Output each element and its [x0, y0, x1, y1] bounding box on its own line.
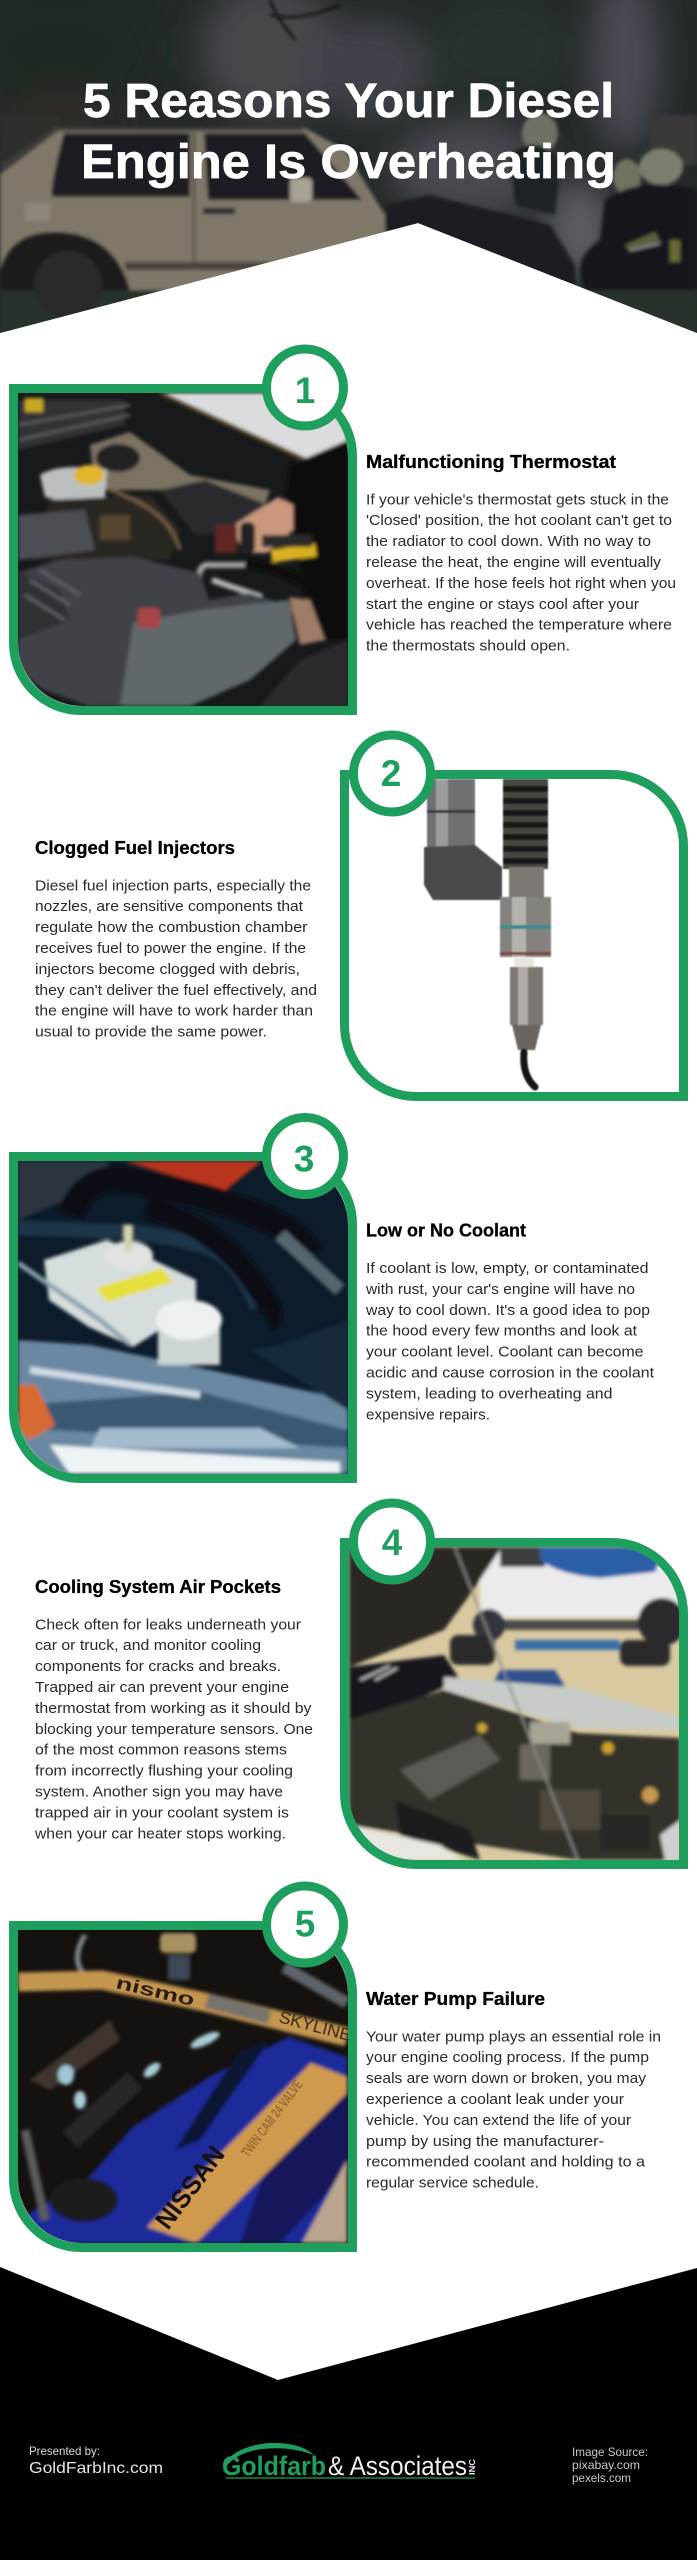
- number badge 3: [266, 1118, 344, 1194]
- photo lettering: SKYLINE: [277, 2008, 353, 2045]
- presented by: GoldFarbInc.com: [29, 2460, 163, 2477]
- text block 1: [366, 452, 676, 655]
- photo: Nissan Skyline engine: [18, 1930, 353, 2243]
- text block 5: regular service schedule.: [366, 2175, 539, 2192]
- text block 2: Clogged Fuel Injectors: [35, 838, 235, 858]
- number badge 4: 4: [382, 1522, 403, 1563]
- text block 2: nozzles, are sensitive components that: [35, 898, 304, 915]
- photo: mechanic working on engine: [18, 393, 348, 706]
- photo: coolant reservoir: [18, 1161, 348, 1474]
- panel 4: cooling system air pockets: [344, 1503, 686, 1864]
- text block 1: If your vehicle's thermostat gets stuck in the: [366, 491, 669, 508]
- text block 5: vehicle. You can extend the life of your: [366, 2112, 631, 2129]
- text block 5: recommended coolant and holding to a: [366, 2154, 646, 2171]
- text block 2: usual to provide the same power.: [35, 1024, 267, 1041]
- logo: Goldfarb &amp; Associates: Goldfarb: [222, 2451, 326, 2481]
- title: Engine Is Overheating: [81, 136, 616, 189]
- header photo: smoking car with firefighters: [0, 0, 697, 345]
- green frame: [14, 388, 352, 710]
- text block 3: your coolant level. Coolant can become: [366, 1344, 644, 1361]
- text block 5: seals are worn down or broken, you may: [366, 2070, 647, 2087]
- text block 5: your engine cooling process. If the pump: [366, 2049, 649, 2066]
- image source: Image Source:: [572, 2445, 648, 2459]
- green frame: [344, 1542, 684, 1864]
- text block 3: with rust, your car's engine will have no: [365, 1281, 635, 1298]
- text block 2: receives fuel to power the engine. If the: [35, 940, 306, 957]
- text block 5: Water Pump Failure: [366, 1989, 545, 2009]
- image source: [572, 2445, 648, 2485]
- text block 2: Diesel fuel injection parts, especially the: [35, 877, 311, 894]
- number badge 4: [354, 1503, 430, 1580]
- number badge 2: [354, 735, 430, 812]
- green frame: [14, 1926, 352, 2248]
- logo: Goldfarb &amp; Associates: [222, 2443, 477, 2481]
- photo: fuel injector: [424, 779, 551, 1087]
- presented by: Presented by:: [29, 2444, 100, 2458]
- photo lettering: TWIN CAM 24 VALVE: [238, 2077, 306, 2160]
- text block 3: way to cool down. It's a good idea to pop: [365, 1302, 650, 1319]
- text block 2: [35, 838, 317, 1041]
- panel 1: malfunctioning thermostat: [14, 349, 352, 710]
- logo: Goldfarb &amp; Associates: INC: [468, 2459, 477, 2475]
- text block 1: release the heat, the engine will eventually: [366, 554, 662, 571]
- photo: open engine bay in a garage: [349, 1547, 686, 1860]
- title: 5 Reasons Your Diesel: [83, 75, 614, 128]
- text block 2: regulate how the combustion chamber: [35, 919, 308, 936]
- text block 1: Malfunctioning Thermostat: [366, 452, 616, 472]
- footer band: [0, 2267, 697, 2560]
- text block 3: If coolant is low, empty, or contaminated: [366, 1260, 648, 1277]
- text block 4: Check often for leaks underneath your: [35, 1616, 301, 1633]
- text block 1: 'Closed' position, the hot coolant can't get to: [366, 512, 672, 529]
- text block 4: Cooling System Air Pockets: [35, 1577, 281, 1597]
- text block 5: experience a coolant leak under your: [366, 2091, 624, 2108]
- text block 2: injectors become clogged with debris,: [35, 961, 300, 978]
- panel 3: low or no coolant: [14, 1118, 352, 1478]
- text block 3: Low or No Coolant: [366, 1221, 526, 1241]
- text block 5: [366, 1989, 661, 2192]
- text block 3: system, leading to overheating and: [366, 1385, 612, 1402]
- number badge 2: 2: [381, 753, 401, 794]
- text block 1: overheat. If the hose feels hot right when you: [366, 575, 676, 592]
- green frame: [14, 1156, 352, 1478]
- number badge 5: [266, 1886, 344, 1963]
- text block 4: of the most common reasons stems: [35, 1742, 287, 1759]
- text block 5: Your water pump plays an essential role in: [366, 2028, 661, 2045]
- text block 1: vehicle has reached the temperature where: [366, 617, 672, 634]
- text block 4: blocking your temperature sensors. One: [35, 1721, 313, 1738]
- text block 3: [365, 1221, 655, 1423]
- panel 5: water pump failure: [14, 1886, 353, 2248]
- green frame: [344, 774, 684, 1096]
- logo: Goldfarb &amp; Associates: & Associates: [328, 2451, 467, 2481]
- text block 4: thermostat from working as it should by: [35, 1700, 312, 1717]
- number badge 1: 1: [295, 370, 315, 411]
- number badge 3: 3: [294, 1138, 314, 1180]
- text block 2: they can't deliver the fuel effectively, and: [35, 982, 317, 999]
- panel 2: clogged fuel injectors: [344, 735, 684, 1096]
- text block 4: car or truck, and monitor cooling: [35, 1637, 261, 1654]
- text block 3: acidic and cause corrosion in the coolant: [366, 1364, 655, 1382]
- title: [81, 75, 616, 189]
- text block 1: the radiator to cool down. With no way to: [366, 533, 651, 550]
- text block 4: system. Another sign you may have: [35, 1784, 283, 1800]
- text block 4: when your car heater stops working.: [34, 1825, 286, 1842]
- image source: pexels.com: [572, 2471, 631, 2485]
- text block 5: pump by using the manufacturer-: [366, 2133, 604, 2150]
- text block 4: [34, 1577, 313, 1842]
- photo lettering: [114, 1972, 353, 2235]
- text block 1: start the engine or stays cool after your: [366, 596, 639, 613]
- photo lettering: nismo: [114, 1972, 197, 2010]
- text block 1: the thermostats should open.: [366, 638, 570, 655]
- text block 3: the hood every few months and look at: [366, 1323, 638, 1340]
- photo lettering: NISSAN: [149, 2140, 231, 2235]
- number badge 1: [266, 349, 344, 426]
- text block 4: from incorrectly flushing your cooling: [35, 1763, 293, 1780]
- text block 3: expensive repairs.: [366, 1406, 490, 1423]
- text block 4: Trapped air can prevent your engine: [35, 1679, 289, 1696]
- number badge 5: 5: [295, 1904, 315, 1945]
- text block 2: the engine will have to work harder than: [35, 1003, 313, 1020]
- text block 4: trapped air in your coolant system is: [35, 1804, 289, 1821]
- image source: pixabay.com: [572, 2458, 640, 2472]
- text block 4: components for cracks and breaks.: [35, 1658, 281, 1675]
- presented by: [29, 2444, 163, 2477]
